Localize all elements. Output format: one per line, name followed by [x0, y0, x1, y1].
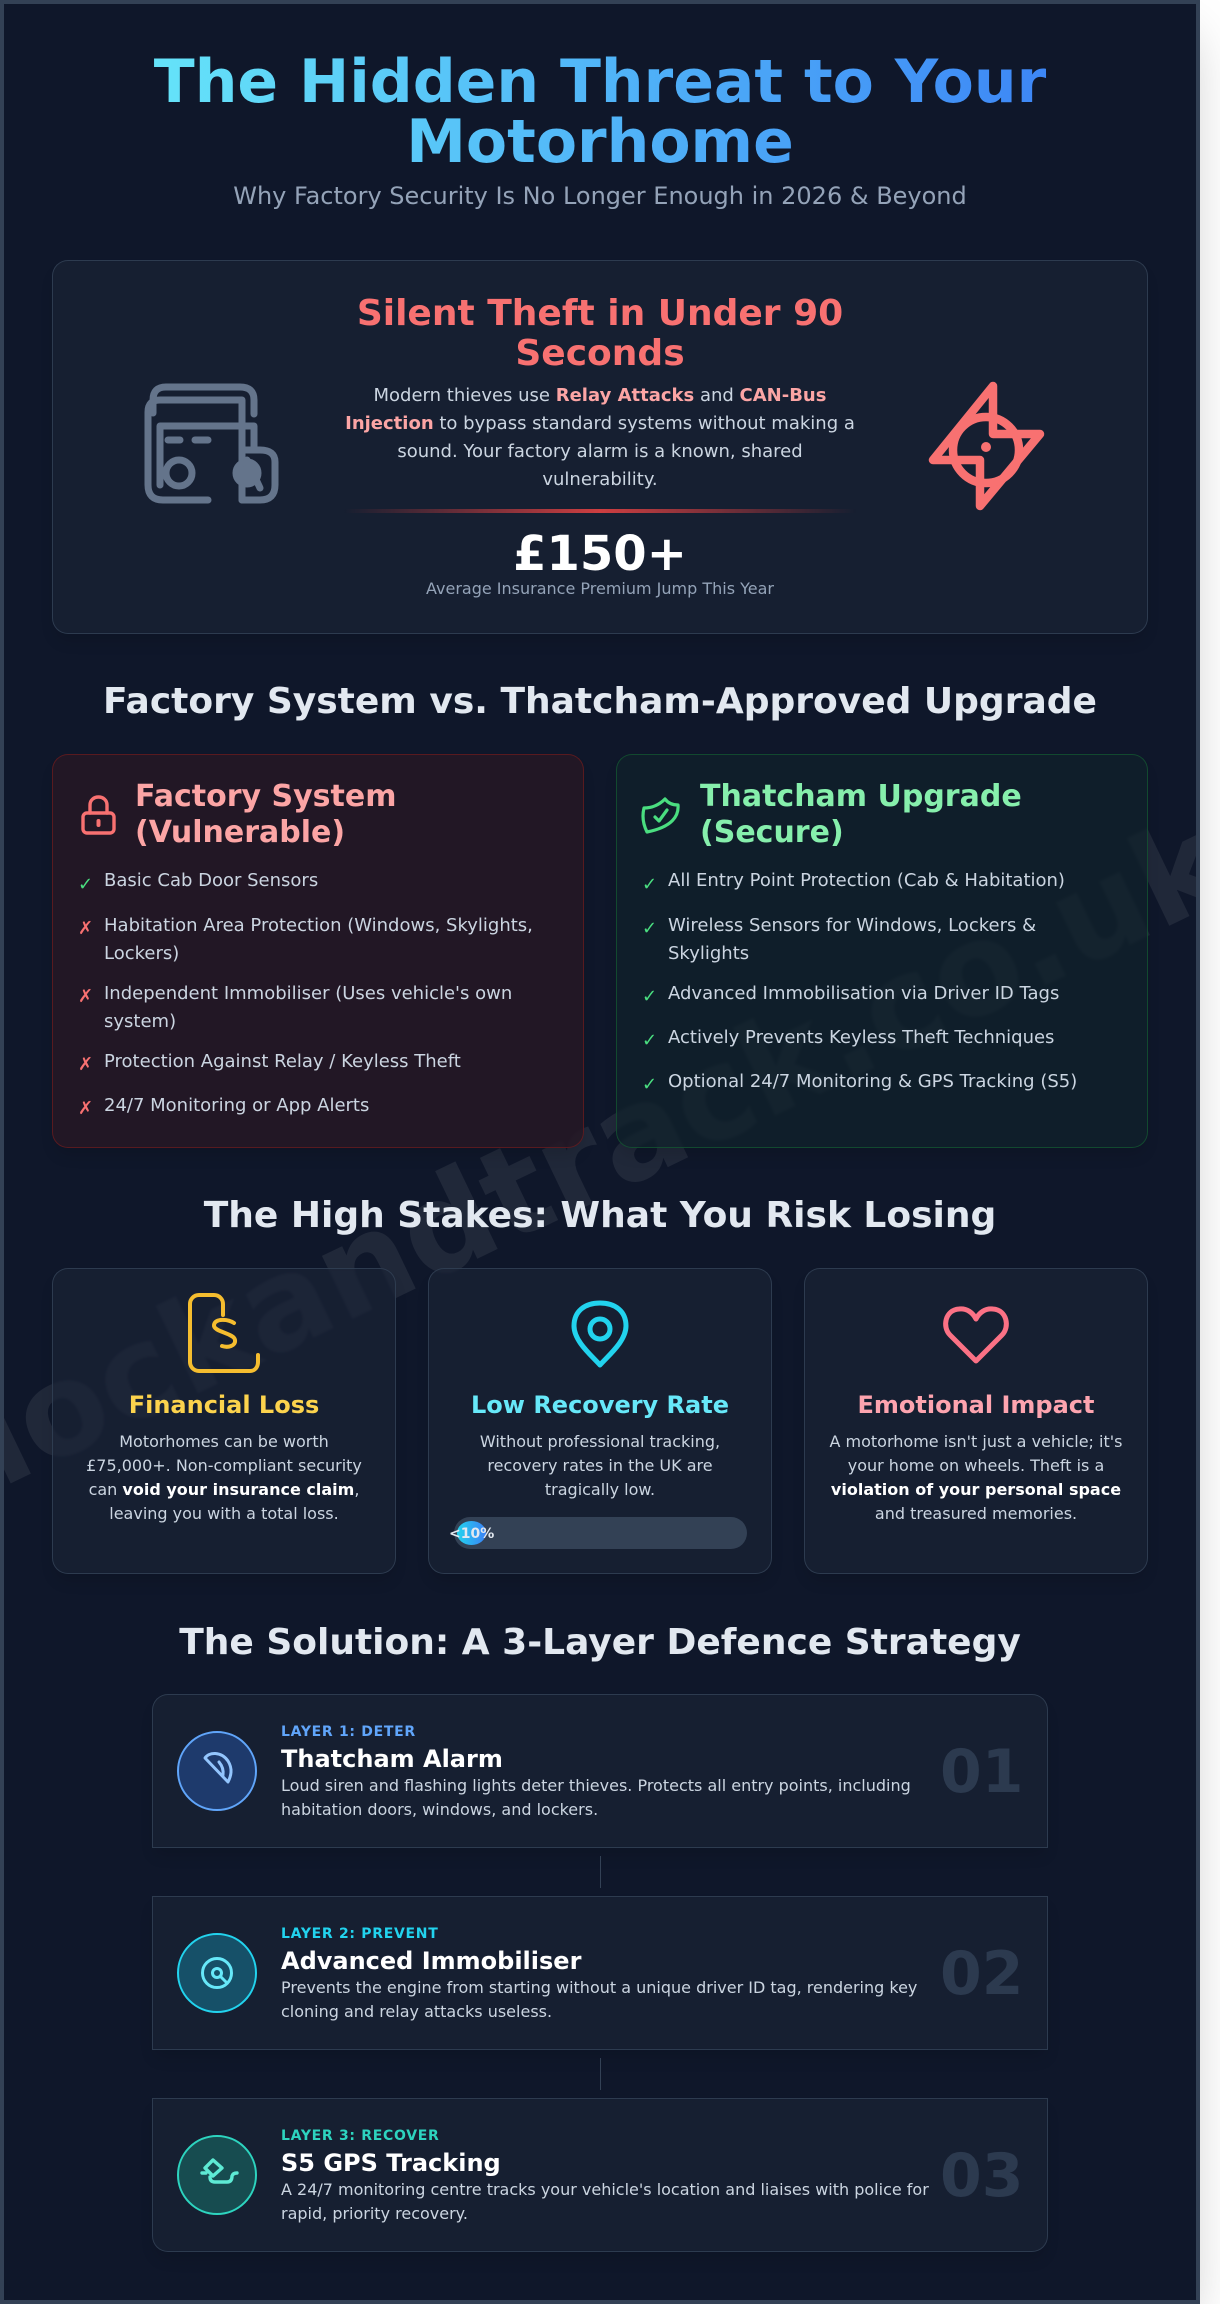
- text: low recovery rate: tragically low.: [545, 1480, 655, 1499]
- heading: silent theft: Seconds: [515, 333, 685, 374]
- panel: financial loss: [52, 1268, 396, 1574]
- list: thatcham features: ✓: [642, 918, 657, 939]
- heading: factory system: (Vulnerable): [135, 815, 345, 850]
- text: layer 3 title: S5 GPS Tracking: [281, 2149, 501, 2177]
- text: emotional impact: violation of your personal space: [831, 1480, 1121, 1499]
- list: factory system features: ✗: [78, 1098, 93, 1119]
- list: factory system features: ✗: [78, 1054, 93, 1075]
- text: financial loss: £75,000+. Non-compliant security: [86, 1456, 362, 1475]
- list: thatcham features: ✓: [642, 986, 657, 1007]
- icon: location pin: [572, 1300, 628, 1368]
- list: factory system features: ✗: [78, 986, 93, 1007]
- list: factory system features: system): [104, 1011, 176, 1032]
- text: low recovery rate: Without professional tracking,: [480, 1432, 720, 1451]
- panel: layer 2: [152, 1896, 1048, 2050]
- text: low recovery rate: [480, 1432, 720, 1499]
- number: 03: 03: [940, 2141, 1024, 2211]
- text: layer 2 title: Advanced Immobiliser: [281, 1947, 581, 1975]
- text: financial loss: [86, 1432, 362, 1523]
- list: factory system features: Basic Cab Door Sensors: [104, 870, 318, 891]
- icon: car with key: [144, 384, 278, 504]
- list: thatcham features: ✓: [642, 1074, 657, 1095]
- text: silent theft description: [345, 385, 855, 490]
- heading: comparison: Factory System vs. Thatcham-Approved Upgrade: [103, 681, 1097, 722]
- heading: solution: The Solution: A 3-Layer Defence Strategy: [179, 1622, 1021, 1663]
- text: layer 3 description: [281, 2180, 929, 2223]
- text: financial loss: Motorhomes can be worth: [119, 1432, 329, 1451]
- heading: high stakes: The High Stakes: What You Risk Losing: [204, 1195, 996, 1236]
- progress bar: [454, 1517, 747, 1549]
- text: silent theft description: Modern thieves use Relay Attacks and CAN-Bus: [374, 385, 826, 406]
- text: emotional impact: [830, 1432, 1122, 1523]
- panel: layer 3: [152, 2098, 1048, 2252]
- text: layer 1 title: Thatcham Alarm: [281, 1745, 503, 1773]
- list: factory system features: Habitation Area Protection (Windows, Skylights,: [104, 915, 533, 936]
- text: layer 3 description: rapid, priority recovery.: [281, 2204, 468, 2223]
- panel: silent theft: [52, 260, 1148, 634]
- icon: heart: [943, 1306, 1009, 1364]
- connector: [600, 1856, 601, 1888]
- heading: factory system: Factory System: [135, 779, 396, 814]
- text: silent theft description: vulnerability.: [542, 469, 658, 490]
- text: layer 1 label: LAYER 1: DETER: [281, 1724, 416, 1740]
- list: factory system features: [78, 870, 533, 1119]
- list: thatcham features: ✓: [642, 1030, 657, 1051]
- heading: low recovery rate: Low Recovery Rate: [471, 1391, 729, 1419]
- list: thatcham features: [642, 870, 1077, 1095]
- list: thatcham features: Skylights: [668, 943, 749, 964]
- panel: factory system: [52, 754, 584, 1148]
- icon: dollar document: [188, 1293, 260, 1373]
- icon: shield check: [641, 797, 680, 834]
- list: factory system features: ✗: [78, 918, 93, 939]
- text: layer 2 description: Prevents the engine from starting without a unique driver ID tag, rendering key: [281, 1978, 917, 1997]
- heading: financial loss: Financial Loss: [129, 1391, 319, 1419]
- stat: premium jump: £150+: [513, 526, 687, 582]
- list: factory system features: Independent Immobiliser (Uses vehicle's own: [104, 983, 512, 1004]
- list: thatcham features: All Entry Point Protection (Cab & Habitation): [668, 870, 1065, 891]
- title: Motorhome: [406, 107, 794, 177]
- icon: layer 3 gps: [177, 2135, 257, 2215]
- panel: emotional impact: [804, 1268, 1148, 1574]
- list: thatcham features: Advanced Immobilisation via Driver ID Tags: [668, 983, 1059, 1004]
- subtitle: Why Factory Security Is No Longer Enough in 2026 & Beyond: [233, 182, 967, 210]
- icon: bolt and ring: [928, 382, 1044, 510]
- progress bar: <10%: [449, 1526, 494, 1542]
- list: thatcham features: Optional 24/7 Monitoring & GPS Tracking (S5): [668, 1071, 1077, 1092]
- list: thatcham features: Wireless Sensors for Windows, Lockers &: [668, 915, 1036, 936]
- text: silent theft description: Injection to bypass standard systems without making a: [345, 413, 855, 434]
- stat label: Average Insurance Premium Jump This Year: [426, 579, 774, 598]
- text: layer 1 description: [281, 1776, 911, 1819]
- connector: [600, 2058, 601, 2090]
- list: thatcham features: Actively Prevents Keyless Theft Techniques: [668, 1027, 1054, 1048]
- text: layer 3 label: LAYER 3: RECOVER: [281, 2128, 440, 2144]
- text: layer 2 description: cloning and relay attacks useless.: [281, 2002, 552, 2021]
- list: factory system features: ✓: [78, 874, 93, 895]
- text: financial loss: can void your insurance claim,: [89, 1480, 359, 1499]
- heading: thatcham upgrade: Thatcham Upgrade: [700, 779, 1022, 814]
- heading: silent theft: [357, 293, 843, 374]
- text: financial loss: leaving you with a total loss.: [109, 1504, 339, 1523]
- list: factory system features: Protection Against Relay / Keyless Theft: [104, 1051, 461, 1072]
- text: silent theft description: sound. Your factory alarm is a known, shared: [397, 441, 803, 462]
- text: layer 1 description: Loud siren and flashing lights deter thieves. Protects all entry points, including: [281, 1776, 911, 1795]
- number: 02: 02: [940, 1939, 1024, 2009]
- icon: layer 1 alarm: [177, 1731, 257, 1811]
- list: factory system features: 24/7 Monitoring or App Alerts: [104, 1095, 369, 1116]
- text: layer 2 label: LAYER 2: PREVENT: [281, 1926, 438, 1942]
- list: factory system features: Lockers): [104, 943, 179, 964]
- title: The Hidden Threat to Your: [154, 47, 1046, 117]
- panel: low recovery rate: [428, 1268, 772, 1574]
- divider: [344, 509, 856, 513]
- text: layer 3 description: A 24/7 monitoring centre tracks your vehicle's location and liaises with police for: [281, 2180, 929, 2199]
- icon: layer 2 immobiliser: [177, 1933, 257, 2013]
- number: 01: 01: [940, 1737, 1024, 1807]
- text: emotional impact: and treasured memories.: [875, 1504, 1077, 1523]
- heading: thatcham upgrade: (Secure): [700, 815, 844, 850]
- heading: thatcham upgrade: [700, 779, 1022, 850]
- title: [52, 52, 1148, 172]
- heading: silent theft: Silent Theft in Under 90: [357, 293, 843, 334]
- panel: layer 1: [152, 1694, 1048, 1848]
- panel: thatcham upgrade: [616, 754, 1148, 1148]
- list: thatcham features: ✓: [642, 874, 657, 895]
- text: emotional impact: A motorhome isn't just a vehicle; it's: [830, 1432, 1122, 1451]
- text: emotional impact: your home on wheels. Theft is a: [848, 1456, 1104, 1475]
- heading: emotional impact: Emotional Impact: [858, 1391, 1094, 1419]
- icon: padlock: [81, 795, 116, 835]
- text: low recovery rate: recovery rates in the UK are: [487, 1456, 713, 1475]
- text: layer 2 description: [281, 1978, 917, 2021]
- heading: factory system: [135, 779, 396, 850]
- text: layer 1 description: habitation doors, windows, and lockers.: [281, 1800, 598, 1819]
